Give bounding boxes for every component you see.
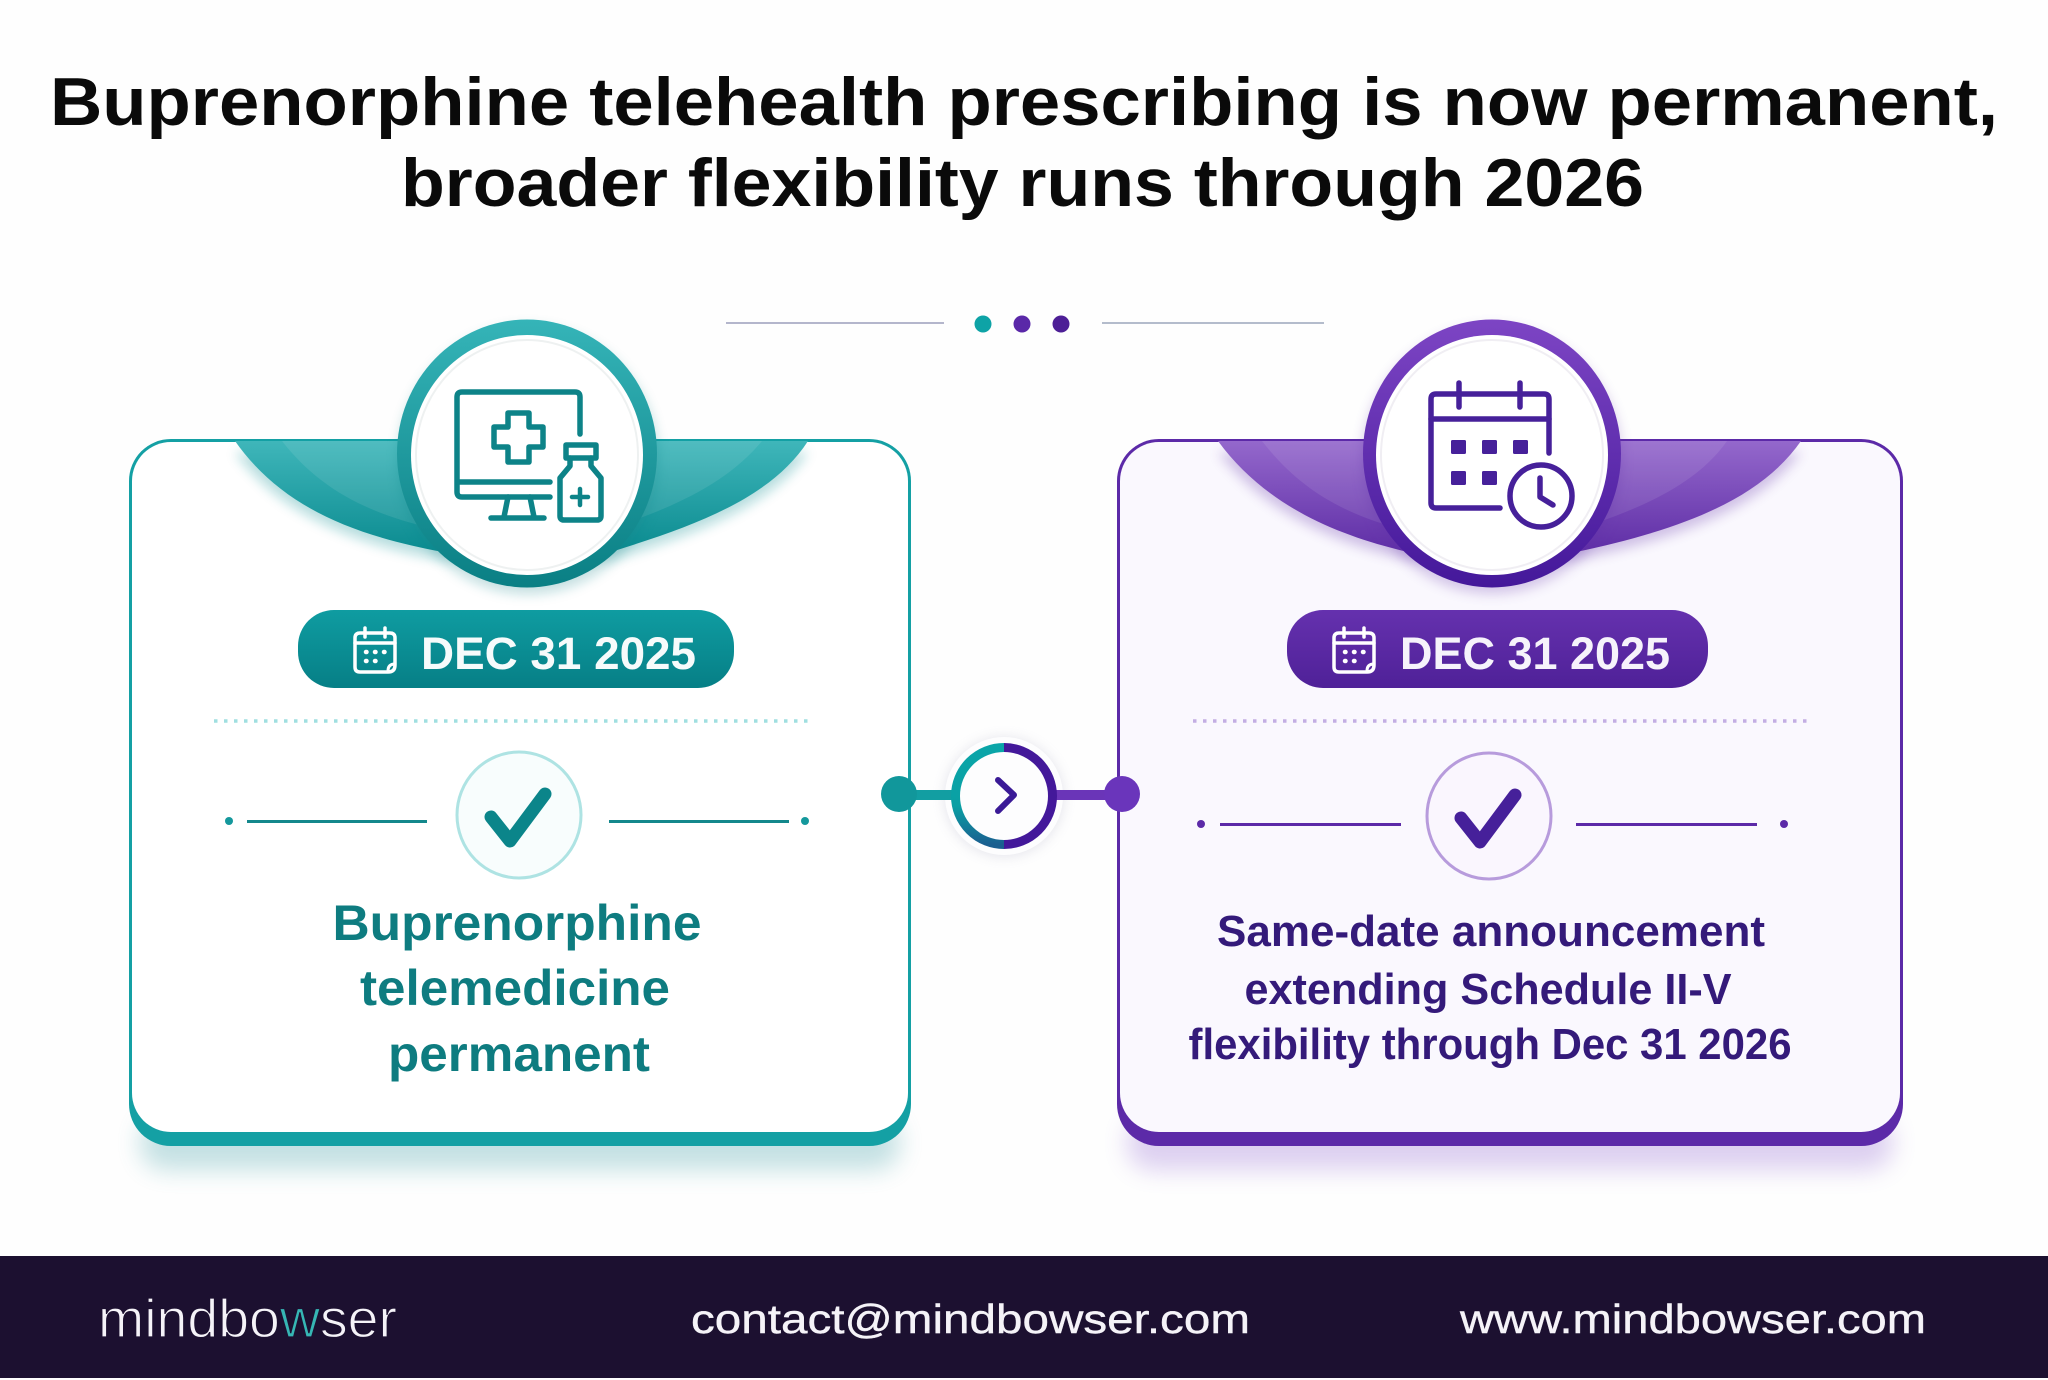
- dotted divider: [1193, 719, 1808, 723]
- date pill: DEC 31 2025: [421, 628, 696, 679]
- teal wing banner: [235, 441, 808, 560]
- panel: right card (Schedule II-V extension): [1117, 320, 1903, 1170]
- logo: mindbowser: mindbowser: [98, 1289, 397, 1349]
- footer bar: [0, 1256, 2048, 1378]
- panel: left card (permanent telemedicine): [129, 320, 911, 1170]
- top ornament: lines and dots: [726, 316, 1324, 332]
- purple wing banner: [1218, 441, 1801, 560]
- arrow connector between cards: [881, 737, 1140, 857]
- card text: [332, 895, 702, 1082]
- card shadow and frame: [129, 439, 911, 1170]
- date pill: [298, 610, 734, 688]
- icon badge: calendar with clock: [1362, 320, 1622, 594]
- contact email: contact@mindbowser.com: [691, 1296, 1250, 1342]
- check badge with side lines: [1197, 753, 1788, 879]
- icon badge: telehealth monitor and medicine bottle: [397, 320, 658, 594]
- title: broader flexibility runs through 2026: [401, 145, 1644, 221]
- check badge with side lines: [225, 752, 809, 878]
- card text: telemedicine: [360, 960, 670, 1016]
- card shadow and frame: [1117, 439, 1903, 1170]
- title: [50, 64, 1998, 221]
- card text: extending Schedule II-V: [1244, 965, 1732, 1014]
- date pill: DEC 31 2025: [1400, 628, 1670, 679]
- website: www.mindbowser.com: [1459, 1296, 1926, 1342]
- card text: Buprenorphine: [332, 895, 702, 951]
- card text: permanent: [388, 1026, 650, 1082]
- card text: Same-date announcement: [1217, 907, 1765, 956]
- date pill: [1287, 610, 1708, 688]
- card text: flexibility through Dec 31 2026: [1188, 1020, 1792, 1069]
- title: Buprenorphine telehealth prescribing is now permanent,: [50, 64, 1998, 140]
- card text: [1188, 907, 1792, 1069]
- dotted divider: [214, 719, 812, 723]
